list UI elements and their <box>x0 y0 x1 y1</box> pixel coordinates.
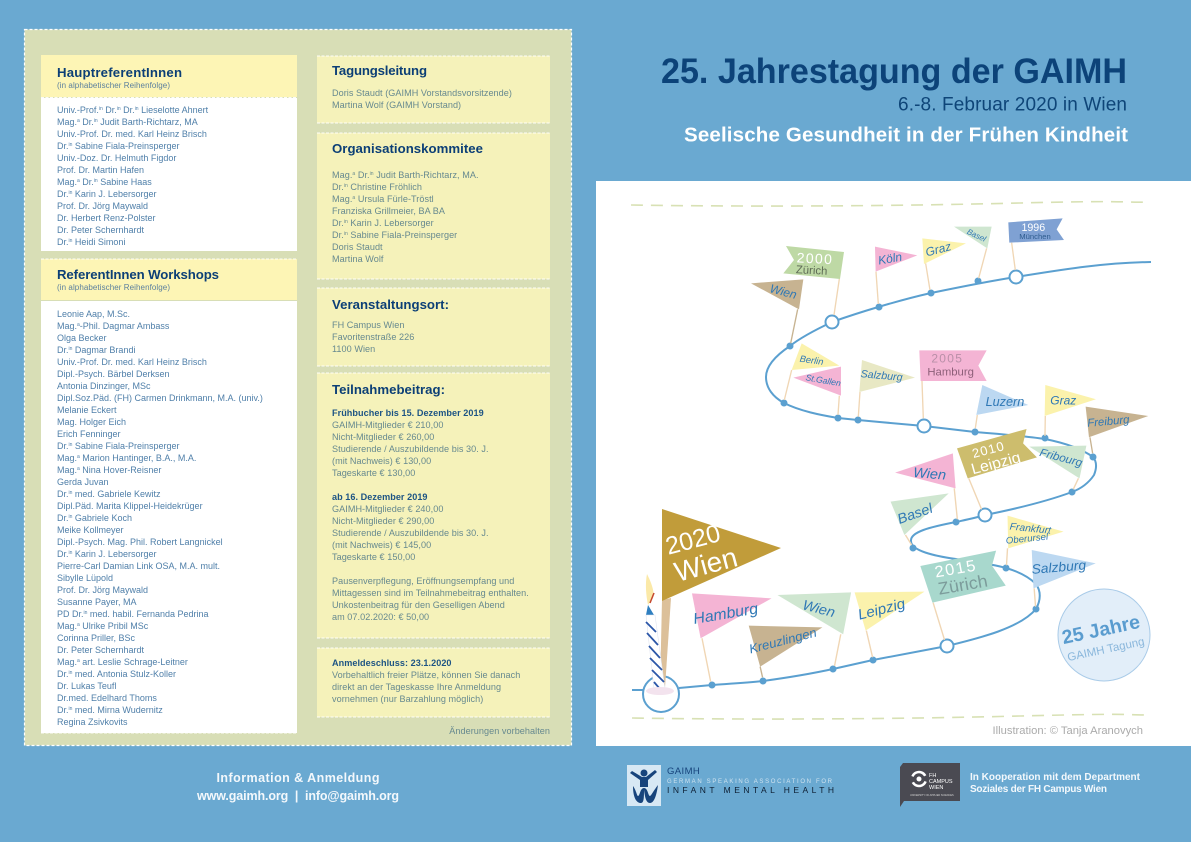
list: workshop speakers: a <box>77 454 80 460</box>
list: keynote speakers: Karin J. Lebersorger <box>72 189 156 199</box>
list: keynote speakers: a <box>77 178 80 184</box>
list: keynote speakers: Dr. <box>80 117 94 127</box>
flag: Graz: Graz <box>924 239 953 259</box>
panel: Anmeldeschluss: Vorbehaltlich freier Plätze, können Sie danach <box>332 670 520 680</box>
list: workshop speakers: in <box>69 706 73 712</box>
panel: Organisationskommitee: in <box>344 219 348 225</box>
flag: 1996 München <box>1008 218 1064 270</box>
flag: Hamburg <box>692 593 772 682</box>
list: workshop speakers <box>57 309 263 727</box>
flag: Frankfurt Oberursel: Frankfurt <box>1009 522 1053 537</box>
flag: Berlin <box>784 343 839 400</box>
list: workshop speakers: a <box>77 658 80 664</box>
logo: FH Campus Wien: CAMPUS <box>929 779 953 785</box>
flag: Köln: Köln <box>877 250 903 268</box>
list: keynote speakers: in <box>117 106 121 112</box>
panel: Teilnahmebeitrag: (mit Nachweis) € 130,00 <box>332 456 431 466</box>
list: workshop speakers: in <box>69 550 73 556</box>
list: workshop speakers: a <box>77 322 80 328</box>
panel: Organisationskommitee: Sabine Fiala-Preinsperger <box>348 230 457 240</box>
panel: Teilnahmebeitrag: Unkostenbeitrag für den Geselligen Abend <box>332 600 505 610</box>
list: workshop speakers: in <box>69 514 73 520</box>
list: workshop speakers: med. habil. Fernanda Pedrina <box>87 609 208 619</box>
panel: Veranstaltungsort: 1100 Wien <box>332 344 375 354</box>
subtitle: Seelische Gesundheit in der Frühen Kindheit <box>684 124 1128 146</box>
panel: illustration <box>596 181 1191 746</box>
list: keynote speakers: in <box>135 106 139 112</box>
list: keynote speakers: Dr. <box>57 189 69 199</box>
flag: Graz <box>922 238 966 290</box>
list: workshop speakers: Dipl.Soz.Päd. (FH) Carmen Drinkmann, M.A. (univ.) <box>57 393 263 403</box>
panel: Tagungsleitung <box>317 56 550 123</box>
flag: 1996 München: München <box>1019 232 1051 241</box>
flag: Wien <box>777 592 851 666</box>
flag: Leipzig <box>855 592 924 657</box>
list: keynote speakers: Mag. <box>57 177 77 187</box>
flag: 2005 Hamburg: 2005 <box>931 352 963 366</box>
panel: Organisationskommitee: Christine Fröhlich <box>348 182 422 192</box>
note: Änderungen vorbehalten: Änderungen vorbehalten <box>449 726 550 736</box>
list: workshop speakers: Dipl.Päd. Marita Klippel-Heidekrüger <box>57 501 203 511</box>
list: workshop speakers: Mag. <box>57 465 77 475</box>
flag: 2015 Zürich <box>920 551 1006 640</box>
panel: Teilnahmebeitrag: am 07.02.2020: € 50,00 <box>332 612 429 622</box>
logo: GAIMH: INFANT MENTAL HEALTH <box>667 785 834 795</box>
flag: Salzburg <box>1031 550 1096 607</box>
list: keynote speakers: Judit Barth-Richtarz, MA <box>98 117 198 127</box>
flag: Graz <box>1045 385 1096 436</box>
logo: FH Campus Wien: FH <box>929 773 936 779</box>
panel: Tagungsleitung: Doris Staudt (GAIMH Vorstandsvorsitzende) <box>332 88 512 98</box>
list: workshop speakers: Nina Hover-Reisner <box>80 465 161 475</box>
flag: 2000 Zürich: Zürich <box>796 264 828 278</box>
panel: Organisationskommitee: in <box>344 183 348 189</box>
panel: left information panel <box>24 30 572 746</box>
flag: 2010 Leipzig: Leipzig <box>969 450 1023 478</box>
flag: Fribourg <box>1029 446 1086 489</box>
list: workshop speakers: Dr. Peter Schernhardt <box>57 645 145 655</box>
flag: Kreuzlingen: Kreuzlingen <box>747 625 818 656</box>
list: workshop speakers: Univ.-Prof. Dr. med. Karl Heinz Brisch <box>57 357 207 367</box>
flag: Freiburg: Freiburg <box>1087 414 1131 430</box>
flag: Basel: Basel <box>965 227 988 244</box>
list: workshop speakers: Susanne Payer, MA <box>57 597 137 607</box>
flag: Basel <box>954 227 992 278</box>
panel: Teilnahmebeitrag: Teilnahmebeitrag: <box>332 382 445 397</box>
flag: 2015 Zürich: 2015 <box>933 557 978 581</box>
panel: Tagungsleitung: Tagungsleitung <box>332 63 427 78</box>
title: 25. Jahrestagung der GAIMH <box>661 51 1127 91</box>
panel: Organisationskommitee: Judit Barth-Richtarz, MA. <box>374 170 479 180</box>
flag: Basel <box>891 493 949 545</box>
list: keynote speakers: Lieselotte Ahnert <box>139 105 209 115</box>
list: workshop speakers: Dr. <box>57 441 69 451</box>
flag: 2010 Leipzig: 2010 <box>970 438 1006 461</box>
panel: Teilnahmebeitrag: Tageskarte € 150,00 <box>332 552 415 562</box>
panel: Organisationskommitee: Mag. <box>332 194 352 204</box>
flag: 2020 Wien gold: Wien <box>671 541 741 588</box>
list: keynote speakers: Univ.-Doz. Dr. Helmuth Figdor <box>57 153 176 163</box>
panel: Veranstaltungsort: Favoritenstraße 226 <box>332 332 414 342</box>
list: workshop speakers: in <box>84 610 88 616</box>
flag: Hamburg: Hamburg <box>692 600 760 628</box>
panel: Organisationskommitee: Dr. <box>332 182 344 192</box>
list: workshop speakers: Meike Kollmeyer <box>57 525 124 535</box>
heading: ReferentInnen Workshops: ReferentInnen Workshops <box>57 267 219 282</box>
list: workshop speakers: a <box>77 622 80 628</box>
flag: 2000 Zürich: 2000 <box>796 249 834 267</box>
list: workshop speakers: Gabriele Koch <box>72 513 132 523</box>
list: workshop speakers: Dr. <box>57 345 69 355</box>
list: workshop speakers: Corinna Priller, BSc <box>57 633 136 643</box>
panel: Teilnahmebeitrag: Nicht-Mitglieder € 290,00 <box>332 516 434 526</box>
list: keynote speakers: Univ.-Prof. <box>57 105 99 115</box>
flag: Salzburg: Salzburg <box>860 368 903 384</box>
list: workshop speakers: Melanie Eckert <box>57 405 117 415</box>
flag: Fribourg: Fribourg <box>1038 447 1084 470</box>
list: workshop speakers: Sibylle Lüpold <box>57 573 113 583</box>
panel: Organisationskommitee: Ursula Fürle-Tröstl <box>355 194 434 204</box>
panel: Referenten Workshops <box>41 259 297 733</box>
timeline track <box>632 262 1151 690</box>
logo: GAIMH: GAIMH <box>667 766 700 777</box>
list: workshop speakers: Mag. Holger Eich <box>57 417 126 427</box>
list: workshop speakers: Mag. <box>57 621 77 631</box>
flag: Wien: Wien <box>912 465 947 484</box>
list: keynote speakers: Dr. <box>121 105 135 115</box>
list: keynote speakers: Prof. Dr. Martin Hafen <box>57 165 144 175</box>
logo: GAIMH: GERMAN SPEAKING ASSOCIATION FOR <box>667 779 833 785</box>
list: workshop speakers: Mag. <box>57 321 77 331</box>
footer: information and registration: Information & Anmeldung <box>216 771 380 785</box>
list: workshop speakers: Antonia Dinzinger, MSc <box>57 381 151 391</box>
flag: 2020 Wien gold <box>660 509 781 688</box>
logo: FH Campus Wien: UNIVERSITY OF APPLIED SCIENCES <box>910 794 954 797</box>
panel: Teilnahmebeitrag: (mit Nachweis) € 145,00 <box>332 540 431 550</box>
panel: Organisationskommitee: Mag. <box>332 170 352 180</box>
flag: Wien: Wien <box>801 598 837 621</box>
flag: Köln <box>875 247 917 304</box>
list: workshop speakers: Karin J. Lebersorger <box>72 549 156 559</box>
flag: Frankfurt Oberursel: Oberursel <box>1005 532 1050 547</box>
flag: Berlin: Berlin <box>799 354 824 367</box>
list: workshop speakers: -Phil. Dagmar Ambass <box>80 321 170 331</box>
footer: information and registration <box>196 771 399 803</box>
list: workshop speakers: Dr. <box>57 549 69 559</box>
list: workshop speakers: Olga Becker <box>57 333 107 343</box>
panel: Organisationskommitee: Doris Staudt <box>332 242 383 252</box>
badge: 25 Jahre GAIMH Tagung <box>1058 589 1150 681</box>
panel: Teilnahmebeitrag: Frühbucher bis 15. Dezember 2019 <box>332 408 484 418</box>
list: keynote speakers: a <box>77 118 80 124</box>
panel: Veranstaltungsort: Veranstaltungsort: <box>332 297 449 312</box>
list: workshop speakers: Dr. <box>57 705 69 715</box>
flag: Wien: Wien <box>768 281 799 302</box>
heading: ReferentInnen Workshops <box>41 259 297 300</box>
flag: St. Gallen: St.Gallen <box>805 372 842 388</box>
list: workshop speakers: Dr. <box>57 489 69 499</box>
list: workshop speakers: Erich Fenninger <box>57 429 121 439</box>
list: keynote speakers: Dr. Peter Schernhardt <box>57 225 145 235</box>
list: keynote speakers: Univ.-Prof. Dr. med. Karl Heinz Brisch <box>57 129 207 139</box>
heading: HauptreferentInnen <box>41 55 297 97</box>
list: workshop speakers: Leonie Aap, M.Sc. <box>57 309 130 319</box>
list: workshop speakers: med. Mirna Wudernitz <box>72 705 163 715</box>
panel: Organisationskommitee: a <box>352 171 355 177</box>
flag: 1996 München: 1996 <box>1021 222 1045 234</box>
list: keynote speakers: in <box>69 190 73 196</box>
list: keynote speakers: in <box>94 178 98 184</box>
list: workshop speakers: Ulrike Pribil MSc <box>80 621 149 631</box>
panel: Teilnahmebeitrag <box>317 373 550 638</box>
list: keynote speakers: Dr. Herbert Renz-Polster <box>57 213 156 223</box>
list: keynote speakers: Dr. <box>103 105 117 115</box>
logo: FH Campus Wien <box>900 763 960 807</box>
list: keynote speakers <box>57 105 209 247</box>
panel: Organisationskommitee: Dr. <box>332 230 344 240</box>
flag: Salzburg <box>858 360 915 417</box>
list: workshop speakers: Sabine Fiala-Preinsperger <box>72 441 179 451</box>
flag: St. Gallen <box>793 367 842 415</box>
panel: Anmeldeschluss <box>317 648 550 717</box>
list: keynote speakers: Sabine Haas <box>98 177 152 187</box>
title block <box>661 51 1128 146</box>
flag: Wien <box>895 453 957 519</box>
panel: Organisationskommitee: in <box>344 231 348 237</box>
list: workshop speakers: med. Gabriele Kewitz <box>72 489 161 499</box>
panel: Teilnahmebeitrag: GAIMH-Mitglieder € 240,00 <box>332 504 443 514</box>
panel: Teilnahmebeitrag: Pausenverpflegung, Eröffnungsempfang und <box>332 576 514 586</box>
list: workshop speakers: PD Dr. <box>57 609 84 619</box>
panel: Organisationskommitee: Franziska Grillmeier, BA BA <box>332 206 446 216</box>
flag: Luzern: Luzern <box>986 395 1024 409</box>
panel: Organisationskommitee: Dr. <box>332 218 344 228</box>
list: workshop speakers: in <box>69 442 73 448</box>
icon: birthday candle <box>646 574 674 695</box>
panel: Teilnahmebeitrag: Studierende / Auszubildende bis 30. J. <box>332 528 489 538</box>
flag: Basel: Basel <box>895 501 936 528</box>
text: cooperation note: Soziales der FH Campus Wien <box>970 784 1107 795</box>
heading: HauptreferentInnen: (in alphabetischer Reihenfolge) <box>57 81 170 90</box>
list: keynote speakers: Dr. <box>80 177 94 187</box>
panel: Organisationskommitee: Karin J. Lebersorger <box>348 218 434 228</box>
flag: 2000 Zürich <box>783 246 844 315</box>
date line: 6.-8. Februar 2020 in Wien <box>898 94 1127 116</box>
list: workshop speakers: Dagmar Brandi <box>72 345 135 355</box>
flag: Wien <box>751 279 803 343</box>
panel: Teilnahmebeitrag: ab 16. Dezember 2019 <box>332 492 428 502</box>
panel: Organisationskommitee <box>317 133 550 279</box>
flag: 2020 Wien gold: 2020 <box>663 519 723 561</box>
panel: Anmeldeschluss: vornehmen (nur Barzahlung möglich) <box>332 694 483 704</box>
list: keynote speakers: Prof. Dr. Jörg Maywald <box>57 201 148 211</box>
list: workshop speakers: Dipl.-Psych. Mag. Phil. Robert Langnickel <box>57 537 223 547</box>
flag: Kreuzlingen <box>747 625 822 677</box>
flags: upper section 1996 to Freiburg <box>751 218 1148 453</box>
logo: GAIMH <box>627 765 834 806</box>
text: cooperation note <box>970 772 1141 795</box>
timeline stops <box>643 270 1096 712</box>
list: workshop speakers: Dr.med. Edelhard Thoms <box>57 693 157 703</box>
flag: Luzern <box>975 385 1028 428</box>
panel: Teilnahmebeitrag: Nicht-Mitglieder € 260,00 <box>332 432 434 442</box>
list: keynote speakers: in <box>69 238 73 244</box>
panel: Veranstaltungsort <box>317 288 550 366</box>
list: keynote speakers: Sabine Fiala-Preinsperger <box>72 141 179 151</box>
panel: Anmeldeschluss: Anmeldeschluss: 23.1.2020 <box>332 658 452 668</box>
list: workshop speakers: art. Leslie Schrage-Leitner <box>80 657 188 667</box>
flag: Freiburg <box>1086 407 1148 453</box>
footer: information and registration: www.gaimh.org | info@gaimh.org <box>196 789 399 803</box>
list: workshop speakers: Dr. <box>57 669 69 679</box>
panel: Organisationskommitee: a <box>352 195 355 201</box>
list: keynote speakers: Mag. <box>57 117 77 127</box>
list: workshop speakers: Dr. <box>57 513 69 523</box>
list: workshop speakers: Dipl.-Psych. Bärbel Derksen <box>57 369 170 379</box>
list: keynote speakers: in <box>99 106 103 112</box>
list: workshop speakers: Mag. <box>57 657 77 667</box>
heading: HauptreferentInnen: HauptreferentInnen <box>57 65 182 80</box>
list: workshop speakers: med. Antonia Stulz-Koller <box>72 669 176 679</box>
list: workshop speakers: in <box>69 670 73 676</box>
panel: Anmeldeschluss: direkt an der Tageskasse Ihre Anmeldung <box>332 682 501 692</box>
flag: 2005 Hamburg: Hamburg <box>927 366 974 378</box>
panel: Teilnahmebeitrag: Tageskarte € 130,00 <box>332 468 415 478</box>
list: workshop speakers: a <box>77 466 80 472</box>
list: keynote speakers: Dr. <box>57 141 69 151</box>
text: cooperation note: In Kooperation mit dem Department <box>970 772 1141 783</box>
flag: 2010 Leipzig <box>957 429 1037 509</box>
badge: 25 Jahre GAIMH Tagung: 25 Jahre <box>1060 611 1142 649</box>
panel: Organisationskommitee: in <box>370 171 374 177</box>
list: keynote speakers: in <box>94 118 98 124</box>
flag: Leipzig: Leipzig <box>856 595 908 624</box>
flags: lower section 2010 to 2020 <box>692 429 1096 682</box>
panel: Organisationskommitee: Martina Wolf <box>332 254 384 264</box>
list: workshop speakers: Dr. Lukas Teufl <box>57 681 116 691</box>
panel: Teilnahmebeitrag: GAIMH-Mitglieder € 210,00 <box>332 420 443 430</box>
flag: Graz: Graz <box>1050 393 1076 407</box>
list: keynote speakers: Heidi Simoni <box>72 237 125 247</box>
list: workshop speakers: Pierre-Carl Damian Link OSA, M.A. mult. <box>57 561 220 571</box>
panel: Teilnahmebeitrag: Mittagessen sind im Teilnahmebeitrag enthalten. <box>332 588 529 598</box>
list: workshop speakers: in <box>69 490 73 496</box>
logo: FH Campus Wien: WIEN <box>929 785 943 791</box>
list: workshop speakers: Marion Hantinger, B.A., M.A. <box>80 453 196 463</box>
flag: 2005 Hamburg <box>919 350 987 418</box>
list: workshop speakers: Prof. Dr. Jörg Maywald <box>57 585 148 595</box>
icon: GAIMH emblem <box>627 765 661 806</box>
flag: 2015 Zürich: Zürich <box>936 571 989 599</box>
list: keynote speakers: Dr. <box>57 237 69 247</box>
list: workshop speakers: Mag. <box>57 453 77 463</box>
panel: Organisationskommitee: Dr. <box>355 170 370 180</box>
panel: Teilnahmebeitrag: Studierende / Auszubildende bis 30. J. <box>332 444 489 454</box>
list: workshop speakers: Regina Zsivkovits <box>57 717 128 727</box>
list: keynote speakers: in <box>69 142 73 148</box>
panel: Organisationskommitee: Organisationskommitee <box>332 141 483 156</box>
list: workshop speakers: Gerda Juvan <box>57 477 109 487</box>
panel: Hauptreferenten <box>41 55 297 251</box>
illustration credit: Illustration: © Tanja Aranovych <box>993 725 1143 737</box>
list: workshop speakers: in <box>69 346 73 352</box>
flag: Frankfurt Oberursel <box>1005 516 1064 565</box>
badge: 25 Jahre GAIMH Tagung: GAIMH Tagung <box>1066 636 1146 664</box>
panel: Veranstaltungsort: FH Campus Wien <box>332 320 404 330</box>
panel: Tagungsleitung: Martina Wolf (GAIMH Vorstand) <box>332 100 461 110</box>
heading: ReferentInnen Workshops: (in alphabetischer Reihenfolge) <box>57 283 170 292</box>
flag: Salzburg: Salzburg <box>1031 558 1087 577</box>
